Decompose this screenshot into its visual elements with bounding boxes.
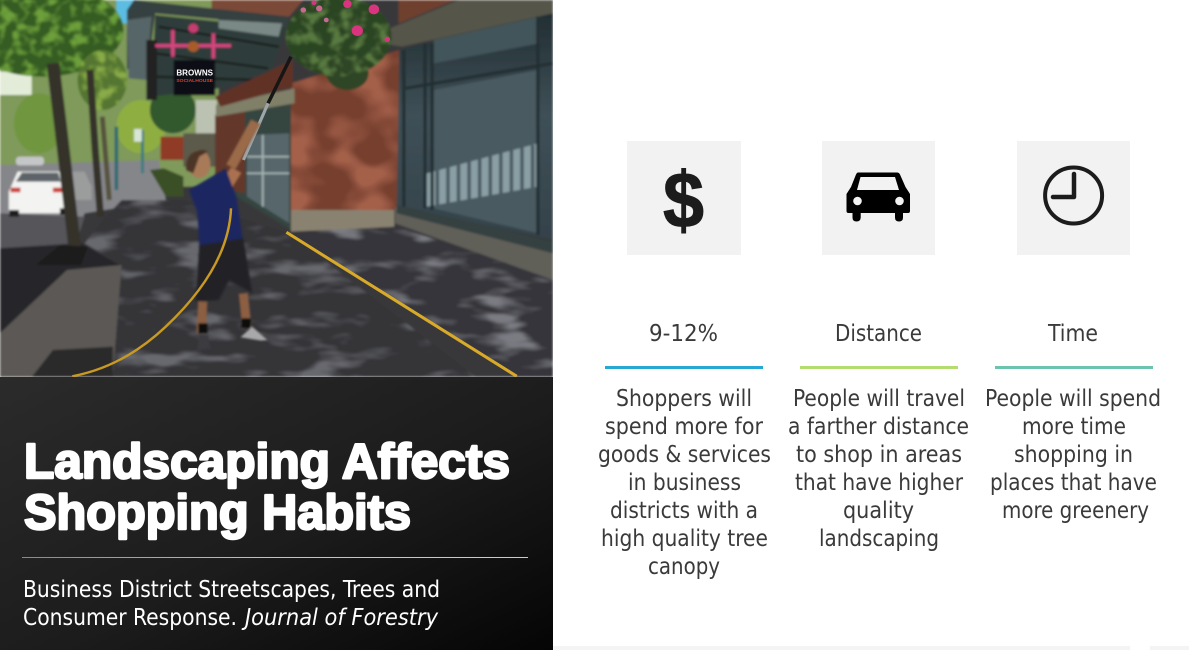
gravel bed	[286, 227, 553, 377]
upper brick	[212, 0, 303, 17]
body text: spend more for	[605, 412, 763, 440]
body text: landscaping	[819, 524, 939, 552]
divider line	[22, 557, 528, 558]
citation text	[23, 575, 440, 631]
accent bar	[995, 366, 1153, 369]
pink flowers	[301, 0, 390, 42]
body text	[598, 384, 771, 580]
body text: goods & services	[598, 440, 771, 468]
heading: 9-12%: 9-12%	[649, 319, 718, 347]
heading	[24, 435, 510, 540]
bottom edge strip	[553, 646, 1189, 650]
icon: dollar sign	[627, 141, 741, 255]
hanging sign frame	[155, 30, 231, 58]
citation text: Business District Streetscapes, Trees and	[23, 575, 440, 603]
heading: Landscaping Affects	[24, 435, 510, 489]
body text: places that have	[990, 468, 1157, 496]
awning	[126, 0, 220, 70]
panel: distance column	[788, 141, 969, 552]
water-fed pole	[243, 57, 291, 160]
body text: more time	[1022, 412, 1126, 440]
body text: a farther distance	[788, 412, 969, 440]
paved sidewalk	[114, 199, 163, 210]
body text: Shoppers will	[616, 384, 752, 412]
shop sign text	[176, 70, 213, 82]
upper brick band	[399, 0, 455, 23]
hanging basket greenery	[286, 0, 391, 90]
heading: Shopping Habits	[24, 486, 411, 540]
body text: in business	[628, 468, 741, 496]
body text	[985, 384, 1161, 524]
brick column	[291, 50, 399, 210]
citation text: Consumer Response.	[23, 603, 237, 631]
upper facade band	[390, 0, 553, 47]
window base wall	[395, 207, 553, 280]
title panel	[0, 377, 553, 650]
distant sky and greenery	[0, 0, 219, 187]
body text: shopping in	[1014, 440, 1133, 468]
person cleaning with the pole	[186, 122, 267, 350]
planter strip	[0, 265, 122, 377]
storefront glass	[236, 106, 290, 228]
body text: to shop in areas	[796, 440, 962, 468]
tree trunks	[53, 63, 76, 257]
body text: more greenery	[1002, 496, 1149, 524]
body text: People will spend	[985, 384, 1161, 412]
body text	[788, 384, 969, 552]
body text: People will travel	[793, 384, 965, 412]
stone base	[291, 210, 394, 232]
parked white car	[9, 172, 67, 213]
heading: Time: Time	[1047, 319, 1098, 347]
large window	[397, 13, 553, 240]
icon: clock	[1017, 141, 1130, 255]
icon: dollar sign: $	[663, 155, 704, 244]
body text: high quality tree	[601, 524, 768, 552]
panel: spending column	[598, 141, 771, 580]
canopy of the street trees	[0, 0, 127, 110]
shop sign text: BROWNS	[176, 69, 214, 77]
accent bar	[800, 366, 958, 369]
body text: districts with a	[610, 496, 758, 524]
street	[0, 159, 167, 218]
photo base tone	[78, 0, 553, 377]
hedge	[150, 168, 183, 197]
storefront sign band	[216, 88, 295, 117]
photo: person watering a hanging basket on a shopping street	[0, 0, 553, 377]
body text: that have higher	[795, 468, 963, 496]
body text: quality	[843, 496, 914, 524]
body text: canopy	[648, 552, 720, 580]
icon: car	[822, 141, 935, 255]
citation text: Journal of Forestry	[241, 603, 438, 631]
panel: time column	[985, 141, 1161, 524]
yellow hose and curb line	[72, 208, 517, 376]
heading: Distance: Distance	[835, 319, 922, 347]
accent bar	[605, 366, 763, 369]
shop sign text: SOCIALHOUSE	[176, 78, 213, 83]
